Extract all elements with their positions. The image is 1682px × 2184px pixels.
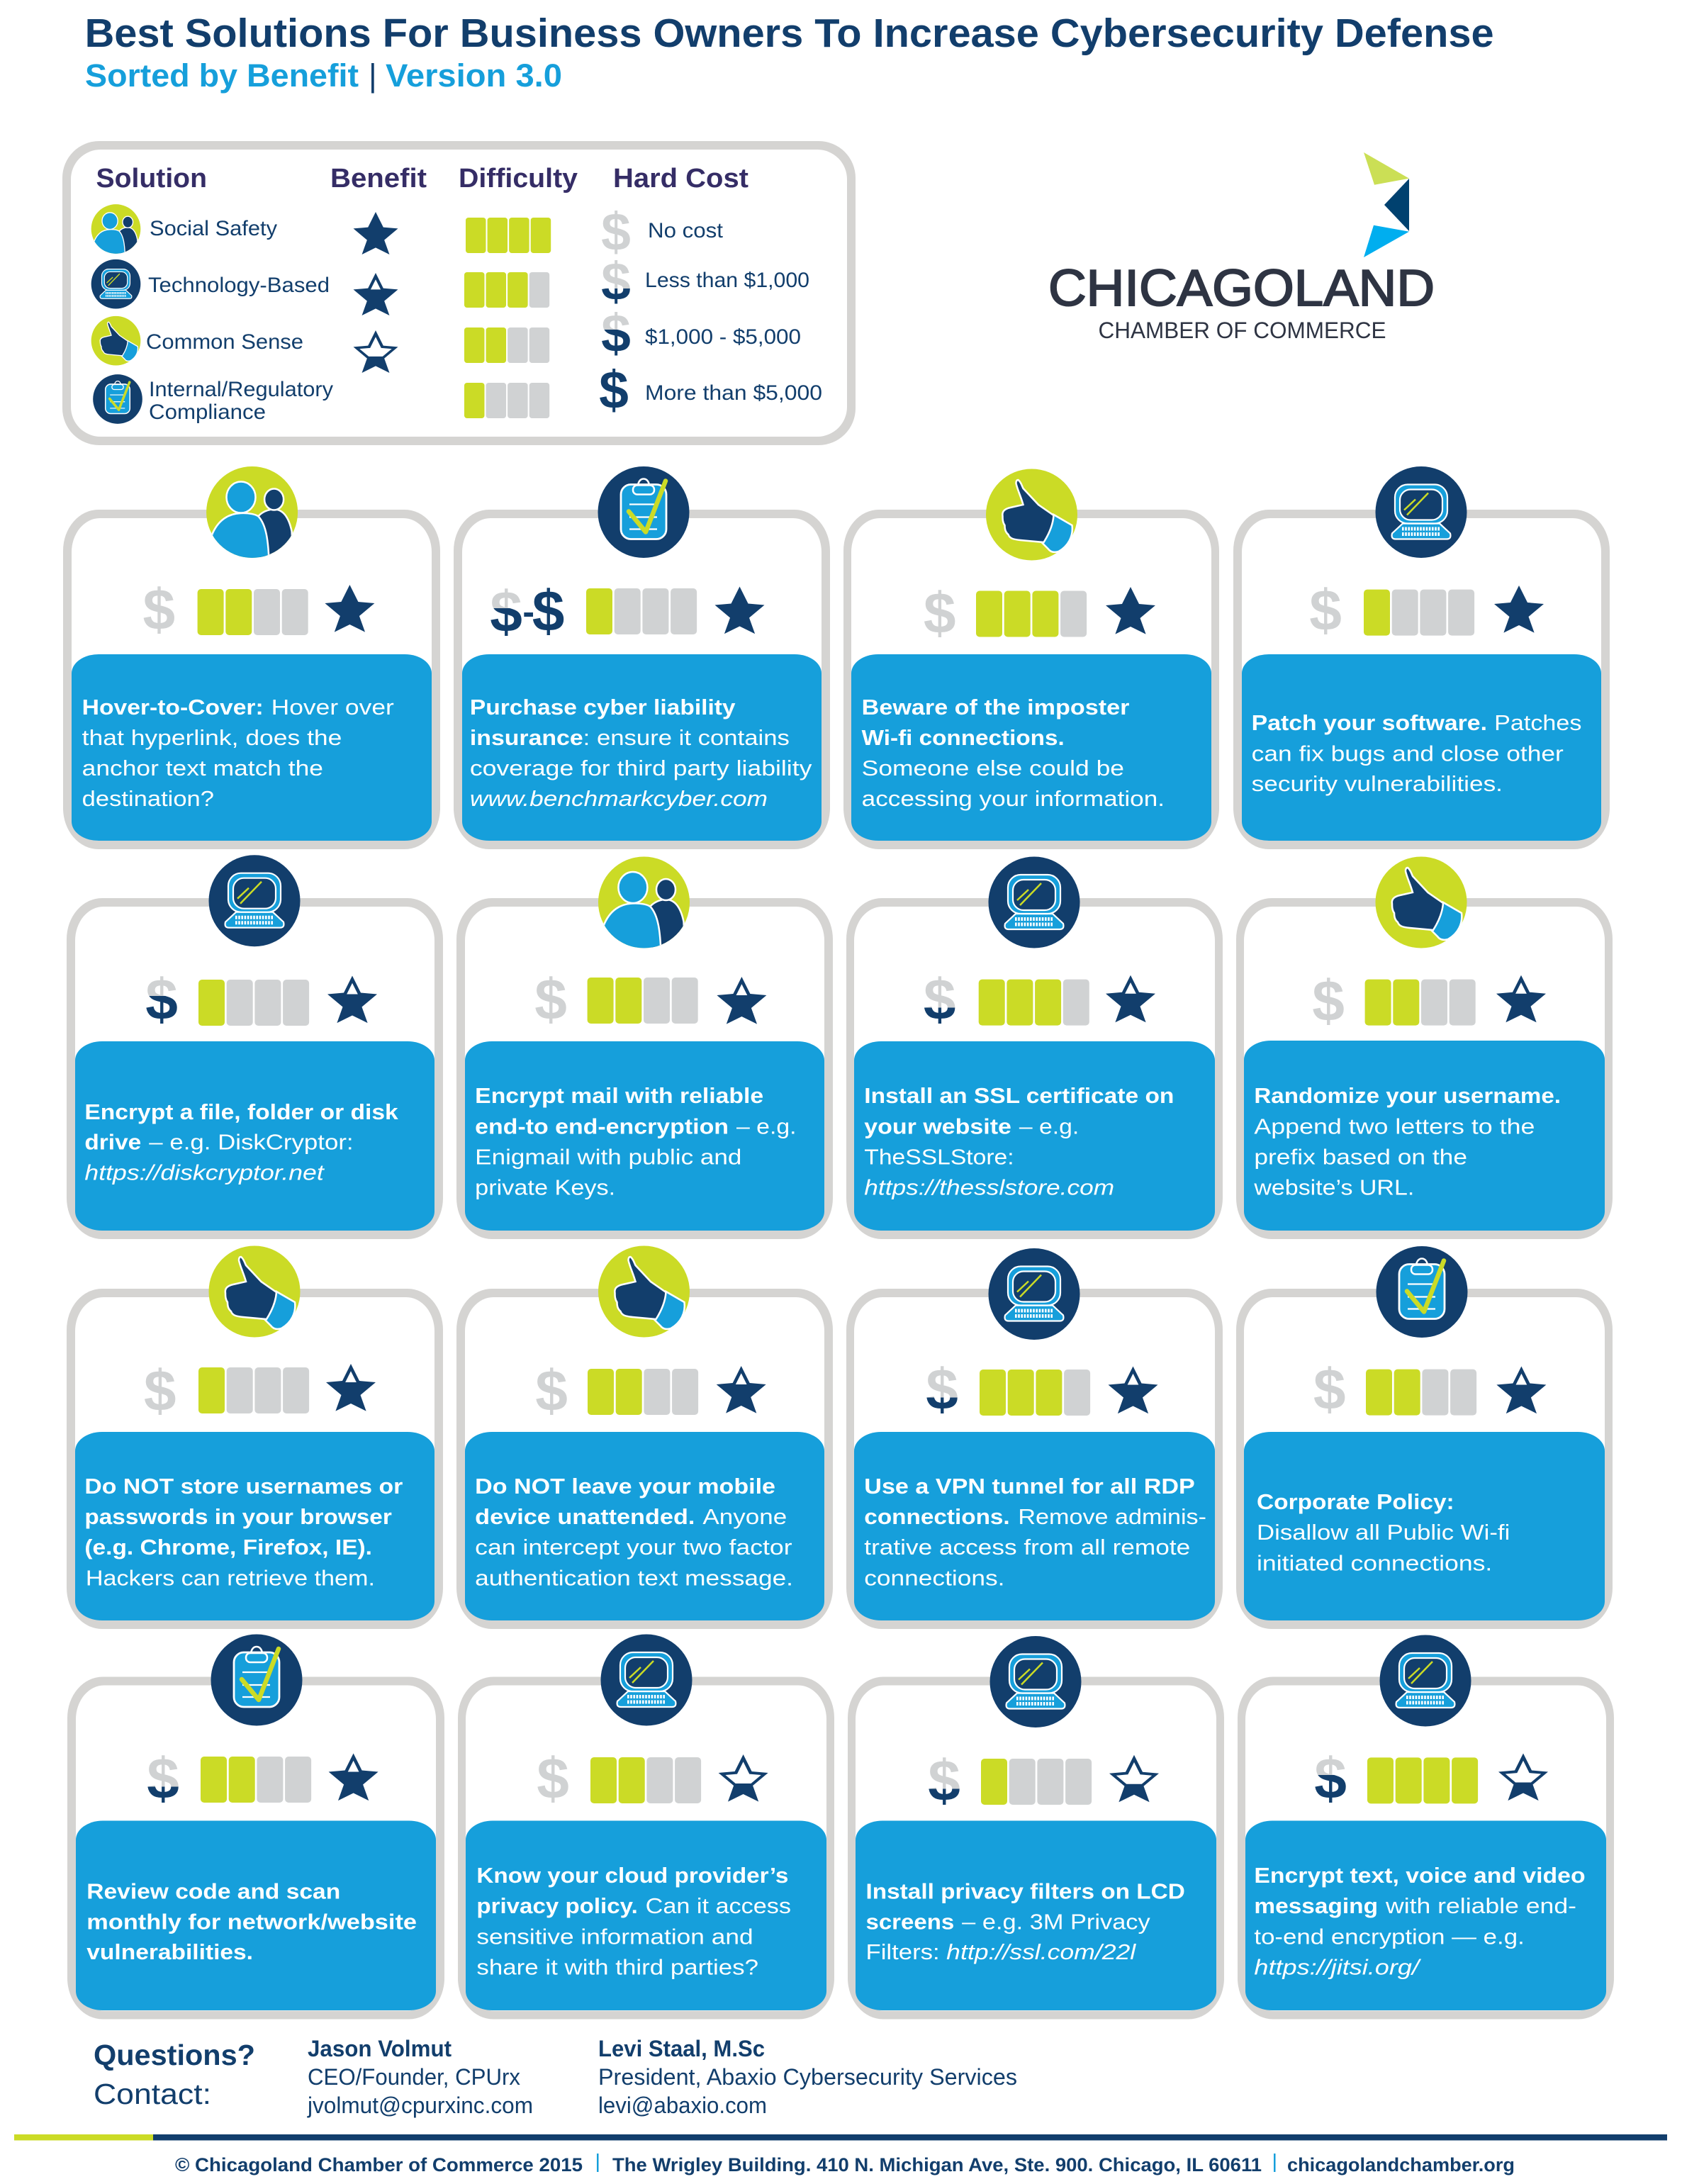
card: cloud provider privacy [458,1635,834,2019]
cost: none: $ [144,1359,176,1423]
cost: low: $ [145,968,178,1032]
contact: Levi Staal: President, Abaxio Cybersecurity Services [598,2064,1017,2090]
card: imposter Wi-fi [843,469,1219,849]
card text [476,1863,791,1979]
contact: Questions?: Questions? [94,2039,255,2071]
icon: technology [1379,1635,1471,1727]
contact: Jason Volmut: Jason Volmut [308,2036,452,2061]
difficulty: 1 bar [981,1759,1092,1805]
card text: https://thesslstore.com [864,1175,1114,1199]
icon: compliance [598,466,689,558]
card text: device unattended. [475,1504,695,1529]
footer text [175,2154,1515,2175]
card text: Randomize your username. [1254,1083,1561,1108]
card text: Encrypt mail with reliable [475,1083,763,1108]
icon: social safety [594,856,690,953]
legend star: half [353,273,398,315]
card text: Filters: [866,1939,940,1964]
card: privacy filters [848,1636,1224,2019]
benefit: half star [1106,975,1155,1022]
card text: – e.g. DiskCryptor: [149,1130,354,1155]
difficulty: 4 bars [1367,1757,1478,1803]
footer text: © Chicagoland Chamber of Commerce 2015 [175,2154,583,2175]
icon: technology [988,1248,1080,1340]
legend icon: compliance [93,374,142,424]
legend dollar: medium cost: $ [601,303,631,363]
card text: Can it access [646,1893,791,1918]
card text: http://ssl.com/22l [946,1939,1136,1964]
card text [864,1474,1206,1590]
benefit: half star [717,1366,766,1413]
footer bar [14,2134,1667,2141]
legend icon: technology [91,259,140,309]
card text: www.benchmarkcyber.com [470,786,768,811]
icon: technology [601,1635,692,1725]
card text: Anyone [702,1504,787,1529]
icon: compliance [211,1635,302,1725]
card text: Patch your software. [1252,710,1487,735]
card text: Hover over [271,695,394,719]
legend label: Internal/Regulatory Compliance: Internal/Regulatory [149,378,333,401]
legend label: Internal/Regulatory Compliance [149,378,333,424]
card text [1252,710,1581,796]
cost: none: $ [1313,1357,1346,1422]
card text: sensitive information and [476,1924,753,1949]
card text: end-to end-encryption [475,1114,729,1138]
card text [475,1474,793,1590]
card: Hover-to-Cover [63,466,440,849]
legend difficulty bars: 1 [464,383,549,418]
cost: none: $ [1312,969,1345,1034]
cost: low: $ [926,1357,958,1422]
cost: range [490,579,564,644]
card text: messaging [1254,1893,1378,1918]
card text [470,695,812,811]
benefit: low star [719,1754,768,1802]
difficulty: 3 bars [976,591,1087,637]
card text: your website [864,1114,1011,1138]
benefit: half star [1496,1367,1546,1413]
legend star: full [353,212,398,254]
benefit: low star [1109,1755,1159,1802]
card text: Someone else could be [862,756,1124,780]
card text: trative access from all remote [864,1535,1190,1559]
card: Install SSL certificate [846,856,1223,1239]
card: Encrypt a file [67,855,443,1239]
legend dollar: no cost: $ [601,202,631,262]
difficulty: 1 bar [1364,590,1474,636]
difficulty: 3 bars [979,980,1089,1026]
card text: can fix bugs and close other [1252,741,1564,766]
card text: screens [866,1909,954,1934]
card text [864,1083,1174,1199]
benefit: full star [1494,586,1544,633]
cost: range: $ [532,579,564,644]
cost: none: $ [535,1359,568,1423]
legend label: $1,000 - $5,000: $1,000 - $5,000 [645,325,801,349]
cost: range: - [522,592,534,632]
card text: insurance [470,725,583,750]
card text [86,1878,417,1964]
card: Encrypt mail [456,856,833,1239]
cost: none: $ [1309,578,1342,643]
card text: can intercept your two factor [475,1535,792,1559]
footer text: The Wrigley Building. 410 N. Michigan Ave, Ste. 900. Chicago, IL 60611 [612,2154,1262,2175]
card text: to-end encryption — e.g. [1254,1924,1525,1949]
card text: website’s URL. [1253,1175,1414,1199]
title: Best Solutions For Business Owners To Increase Cybersecurity Defense [85,11,1494,56]
card text: Install privacy filters on LCD [866,1878,1185,1903]
card text: Encrypt text, voice and video [1254,1863,1586,1888]
card text: privacy policy. [476,1893,638,1918]
cost: none: $ [924,581,956,646]
card: cyber liability insurance [454,466,830,849]
logo: Chicagoland Chamber of Commerce: CHICAGOLAND [1048,260,1435,317]
footer text: chicagolandchamber.org [1287,2154,1515,2175]
icon: technology [988,856,1080,948]
card text: – e.g. [736,1114,797,1138]
legend label: Social Safety: Social Safety [150,217,277,240]
card text: Use a VPN tunnel for all RDP [864,1474,1195,1499]
subtitle: Sorted by Benefit [85,57,359,94]
legend heading: Solution: Solution [96,164,207,194]
card text: connections. [864,1565,1004,1590]
card text: coverage for third party liability [470,756,812,780]
card text [475,1083,797,1199]
icon: common sense [598,1246,690,1337]
contact: Jason Volmut: CEO/Founder, CPUrx [308,2064,520,2090]
card text: accessing your information. [862,786,1165,811]
card text [84,1099,399,1185]
cost: low: $ [147,1747,179,1811]
card text: prefix based on the [1254,1144,1467,1169]
legend difficulty bars: 3 [464,272,549,308]
contact: Jason Volmut [307,2036,533,2118]
benefit: half star [327,975,377,1023]
cost: none: $ [537,1747,569,1811]
cost: low: $ [924,968,956,1032]
card text: share it with third parties? [476,1954,758,1979]
contact: Levi Staal [598,2036,1017,2118]
card text: Wi-fi connections. [862,725,1065,750]
benefit: low star [1498,1754,1548,1801]
card text: Do NOT leave your mobile [475,1474,775,1499]
benefit: half star [1109,1367,1158,1413]
cost: none: $ [142,578,175,642]
card text: Enigmail with public and [475,1144,741,1169]
legend dollar: low cost: $ [601,252,631,311]
legend heading: Difficulty: Difficulty [459,164,578,194]
cost: range: $ [490,580,522,644]
card text: monthly for network/website [86,1909,417,1934]
subtitle [85,57,562,94]
card text: Patches [1494,710,1581,735]
subtitle: | [369,57,377,94]
legend icon: common sense [91,316,140,366]
card text: Purchase cyber liability [470,695,736,719]
card text [866,1878,1185,1964]
card text: private Keys. [475,1175,615,1199]
legend dollar: high cost: $ [599,360,629,420]
contact: Questions? [94,2039,255,2110]
difficulty: 2 bars [1366,1370,1476,1416]
benefit: half star [717,977,766,1024]
card text: TheSSLStore: [864,1144,1014,1169]
card text: passwords in your browser [84,1504,392,1529]
difficulty: 2 bars [198,589,308,635]
card: Review code [67,1635,444,2019]
card text [862,695,1165,811]
legend label: More than $5,000: More than $5,000 [645,381,822,405]
icon: social safety [203,466,298,563]
card text: vulnerabilities. [86,1939,253,1964]
card text: Append two letters to the [1254,1114,1535,1138]
contact: Questions?: Contact: [94,2078,211,2110]
legend label: Common Sense: Common Sense [146,330,303,354]
difficulty: 2 bars [1365,980,1476,1026]
panel: legend [62,141,856,445]
icon: common sense [208,1246,301,1337]
card text: with reliable end- [1385,1893,1576,1918]
legend icon: social safety [89,204,140,257]
contact: Jason Volmut: jvolmut@cpurxinc.com [307,2093,533,2118]
legend heading: Benefit: Benefit [330,164,427,194]
benefit: full star [1106,587,1155,634]
card text: connections. [864,1504,1010,1529]
card text: Review code and scan [86,1878,340,1903]
subtitle: Version 3.0 [386,57,562,94]
card: Do NOT leave your mobile [456,1246,833,1629]
legend difficulty bars: 4 [466,218,551,253]
card text [1253,1083,1561,1199]
logo: Chicagoland Chamber of Commerce [1048,152,1435,343]
card text: Hackers can retrieve them. [86,1565,375,1590]
card text: https://diskcryptor.net [84,1160,325,1185]
icon: technology [208,855,301,946]
difficulty: 3 bars [980,1370,1090,1416]
card text: Corporate Policy: [1257,1489,1454,1514]
benefit: half star [326,1364,376,1411]
icon: technology [1375,466,1467,558]
difficulty: 1 bar [198,980,309,1026]
cost: low: $ [928,1749,960,1813]
card text: Install an SSL certificate on [864,1083,1174,1108]
difficulty: 1 bar [198,1367,309,1413]
difficulty: 2 bars [588,1369,698,1415]
card: VPN tunnel [846,1248,1223,1629]
legend label: Less than $1,000: Less than $1,000 [645,269,809,292]
card text: Do NOT store usernames or [84,1474,403,1499]
card text [1257,1489,1510,1575]
benefit: full star [325,585,374,632]
card: Randomize your username [1236,856,1613,1239]
card text: drive [84,1130,141,1155]
icon: technology [989,1636,1082,1727]
legend heading: Hard Cost: Hard Cost [613,164,749,194]
card: Patch your software [1233,466,1610,849]
card text: security vulnerabilities. [1252,771,1503,796]
difficulty: 2 bars [590,1757,701,1803]
card text: authentication text message. [475,1565,793,1590]
legend difficulty bars: 2 [464,327,549,363]
cost: medium: $ [1314,1747,1347,1811]
difficulty: 2 bars [201,1757,311,1803]
cost: none: $ [534,968,567,1032]
card text: Disallow all Public Wi-fi [1257,1520,1510,1545]
card text: : ensure it contains [583,725,790,750]
card text: destination? [82,786,214,811]
benefit: full star [714,587,764,634]
card text: Encrypt a file, folder or disk [84,1099,399,1124]
card: Encrypt text, voice and video [1238,1635,1614,2019]
legend label: Internal/Regulatory Compliance: Compliance [149,401,266,424]
difficulty: 2 bars [588,978,698,1024]
card text: that hyperlink, does the [82,725,342,750]
card text: https://jitsi.org/ [1254,1954,1422,1979]
icon: common sense [1375,856,1467,948]
card text: – e.g. 3M Privacy [962,1909,1150,1934]
card text: Remove adminis- [1018,1504,1206,1529]
card text: Beware of the imposter [862,695,1129,719]
card text: anchor text match the [82,756,323,780]
icon: common sense [986,469,1077,560]
legend star: low [353,330,398,373]
benefit: half star [329,1754,379,1801]
benefit: half star [1496,975,1546,1022]
difficulty: 1 bar [586,588,697,634]
logo: Chicagoland Chamber of Commerce: CHAMBER OF COMMERCE [1099,318,1386,343]
card text: (e.g. Chrome, Firefox, IE). [84,1535,372,1559]
contact: Levi Staal: Levi Staal, M.Sc [598,2036,765,2061]
card text [1254,1863,1586,1979]
card text: initiated connections. [1257,1550,1492,1575]
card text: – e.g. [1019,1114,1079,1138]
card text: Hover-to-Cover: [82,695,264,719]
card text: Know your cloud provider’s [476,1863,788,1888]
card text [82,695,394,811]
contact: Levi Staal: levi@abaxio.com [598,2093,767,2118]
icon: compliance [1377,1246,1467,1338]
card: Corporate Policy [1236,1246,1613,1629]
legend label: No cost: No cost [648,219,724,242]
card: Do NOT store usernames [67,1246,443,1629]
legend label: Technology-Based: Technology-Based [148,274,330,297]
card text [84,1474,403,1590]
